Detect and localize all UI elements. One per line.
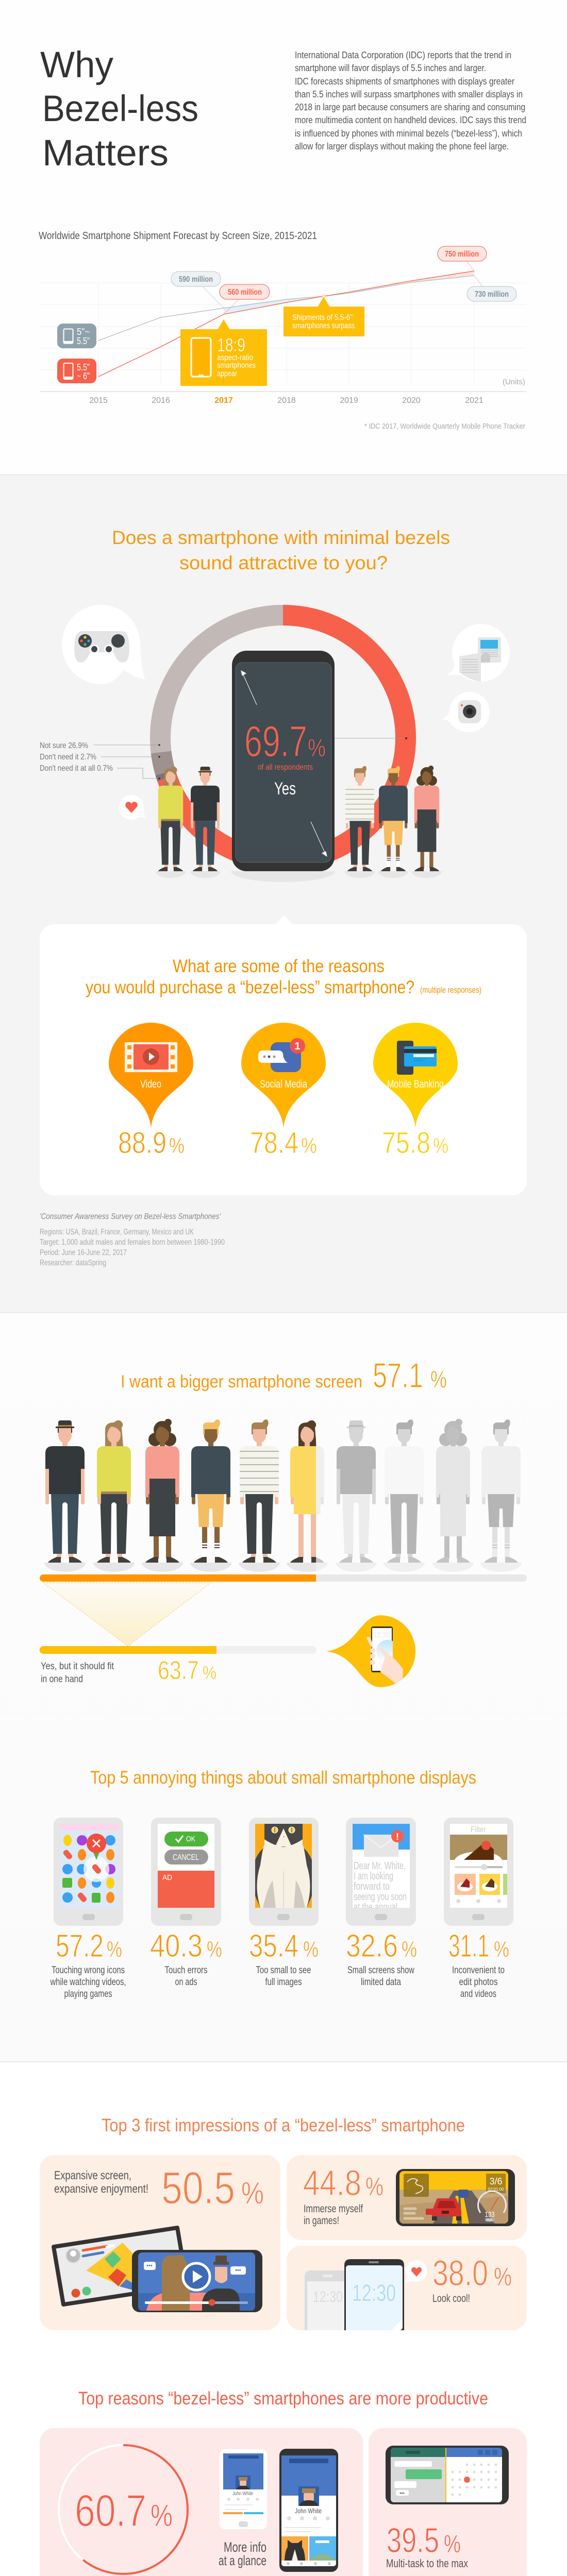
racing game phone: 133 — [485, 2210, 495, 2219]
expansive text — [54, 2168, 148, 2195]
donut labels: Don't need it at all 0.7% — [40, 764, 113, 773]
survey note: Researcher: dataSpring — [40, 1259, 106, 1267]
yes: Yes — [274, 779, 296, 799]
racing game phone — [396, 2169, 515, 2226]
gray series — [98, 276, 474, 341]
year axis labels — [89, 396, 483, 405]
intro text block: than 5.5 inches will surpass smartphones with smaller displays in — [295, 89, 523, 99]
line chart — [40, 246, 526, 405]
large profile phone: John White — [295, 2507, 322, 2515]
back phone: 12:30 — [313, 2289, 343, 2306]
small profile phone: John White — [232, 2491, 253, 2497]
top 5 percents: % — [107, 1937, 122, 1962]
racing game phone: 02:01:00 — [488, 2187, 504, 2192]
callout: shipments surpass — [284, 297, 364, 336]
heart bubble — [405, 2260, 427, 2283]
front phone — [344, 2259, 404, 2330]
red series — [98, 271, 474, 377]
phone: touch errors on ads — [151, 1818, 221, 1926]
intro text block: is influenced by phones with minimal bezels (“bezel-less”), which — [295, 128, 522, 139]
heading: bigger screen: % — [430, 1366, 447, 1393]
video phone illustration: ••• — [146, 2263, 153, 2269]
tablet illustration — [54, 2228, 187, 2304]
phone: touch errors on ads: AD — [162, 1873, 172, 1882]
legend: 5 to 5.5 inch: 5"~ — [77, 327, 90, 337]
callout: 18:9: aspect-ratio — [217, 353, 253, 362]
top 5 percents: % — [207, 1937, 222, 1962]
phone: limited data: ! — [396, 1832, 399, 1842]
callout: 750 million — [438, 246, 487, 271]
reasons heading — [86, 956, 481, 997]
top 5 percents: 32.6 — [346, 1928, 398, 1964]
callout: 560 million — [220, 284, 270, 314]
phone: touch errors on ads: OK — [186, 1835, 195, 1843]
legend: 5.5 to 6 inch: ~ 6" — [77, 371, 90, 381]
expansive text: expansive enjoyment! — [54, 2182, 148, 2195]
top 5 descriptions: full images — [265, 1976, 302, 1988]
progress bar: 57.1 percent — [40, 1574, 527, 1582]
icon: film — [125, 1042, 177, 1072]
phone: limited data: forward to — [354, 1881, 390, 1892]
pin: mobile banking — [373, 1023, 458, 1128]
survey note: Period: June 16-June 22, 2017 — [40, 1248, 127, 1257]
percent: 75.8: % — [433, 1133, 448, 1158]
immersive text — [304, 2203, 363, 2227]
legend: 5 to 5.5 inch — [57, 324, 96, 348]
callout: 560 million: 560 million — [228, 288, 262, 297]
one hand label: in one hand — [41, 1674, 83, 1685]
one hand label — [41, 1661, 114, 1685]
top 5 descriptions: Too small to see — [256, 1964, 311, 1976]
phone: edit photos — [444, 1818, 513, 1926]
percent: 60.7: 60.7 — [75, 2486, 146, 2536]
top 5 descriptions: Inconvenient to — [452, 1964, 505, 1976]
pin: social media — [241, 1023, 326, 1128]
look cool text: Look cool! — [432, 2293, 470, 2304]
phone: limited data: at the annual — [354, 1902, 397, 1913]
racing game phone: mph — [487, 2219, 493, 2222]
panel: expansive screen — [40, 2155, 280, 2330]
multitask phone — [386, 2446, 509, 2504]
multitask phone: ••• — [399, 2490, 405, 2496]
callout: shipments surpass: Shipments of 5.5-6" — [292, 313, 353, 322]
heading: top 3: Top 3 first impressions of a “bezel-less” smartphone — [102, 2115, 465, 2136]
top 5 percents: 31.1 — [448, 1928, 489, 1964]
top 5 descriptions — [50, 1964, 505, 1999]
phone: wrong icons — [54, 1818, 123, 1926]
title — [40, 45, 198, 174]
top 5 descriptions: edit photos — [459, 1976, 498, 1988]
racing game phone: 3/6 — [489, 2176, 503, 2187]
survey note: Regions: USA, Brazil, France, Germany, Mexico and UK — [40, 1228, 194, 1236]
top 5 percents: 40.3 — [150, 1928, 203, 1964]
year axis labels: 2017 — [214, 396, 233, 405]
percent: 78.4: % — [301, 1133, 317, 1158]
panel: look cool — [287, 2246, 527, 2330]
legend: 5 to 5.5 inch: 5.5" — [77, 336, 90, 346]
heading: bigger screen: I want a bigger smartphone screen — [121, 1372, 362, 1392]
top 5 percents: % — [494, 1937, 509, 1962]
icon: card — [397, 1041, 437, 1075]
intro text block: allow for larger displays without making the phone feel large. — [295, 141, 509, 151]
pin: video — [109, 1023, 193, 1128]
phone body — [232, 651, 335, 871]
expansive text: Expansive screen, — [54, 2168, 131, 2182]
top 5 descriptions: Touching wrong icons — [52, 1964, 125, 1976]
video phone illustration: ••• — [235, 2267, 241, 2274]
icon: social: 1 — [294, 1041, 301, 1052]
phone: limited data: seeing you soon — [354, 1891, 407, 1903]
heading: bigger screen: 57.1 — [373, 1356, 423, 1395]
percent: 50.5: 50.5 — [161, 2162, 235, 2213]
bubble: gamepad — [62, 605, 145, 684]
panel: multi-task — [369, 2428, 527, 2576]
heading: more productive: Top reasons “bezel-less” smartphones are more productive — [78, 2388, 488, 2409]
top 5 percents: 35.4 — [249, 1928, 298, 1964]
area between lines — [224, 271, 474, 314]
percent: 44.8: % — [365, 2172, 383, 2201]
heading: does a smartphone: sound attractive to you? — [179, 552, 388, 573]
legend: 5.5 to 6 inch — [57, 359, 96, 383]
phone shadow — [231, 871, 335, 882]
chart footnote: * IDC 2017, Worldwide Quarterly Mobile Phone Tracker — [364, 422, 525, 431]
pin: mobile banking: Mobile Banking — [387, 1078, 444, 1090]
phone: limited data: I am looking — [354, 1871, 393, 1882]
bubble: camera — [441, 692, 490, 732]
percent: 88.9: 88.9 — [118, 1126, 166, 1160]
top 5 percents: % — [303, 1937, 319, 1962]
percent: 75.8: 75.8 — [382, 1126, 430, 1160]
chart title: Worldwide Smartphone Shipment Forecast by Screen Size, 2015-2021 — [39, 230, 317, 242]
video phone illustration — [132, 2250, 262, 2312]
callout: 18:9: smartphones — [217, 361, 256, 370]
icon: social — [258, 1038, 305, 1072]
intro text block: smartphone will favor displays of 5.5 inches and larger. — [295, 63, 486, 73]
intro text block: IDC forecasts shipments of smartphones with displays greater — [295, 76, 514, 87]
year axis labels: 2020 — [402, 396, 421, 405]
year axis labels: 2016 — [152, 396, 170, 405]
bubble: heart — [119, 795, 145, 820]
panel: immersive games — [287, 2155, 527, 2240]
intro text block: 2018 in large part because consumers are sharing and consuming — [295, 102, 525, 112]
panel: reasons — [40, 916, 527, 1195]
top 5 descriptions: limited data — [361, 1976, 401, 1988]
title: Matters — [42, 133, 169, 174]
expand arrows — [241, 671, 327, 856]
survey note: 'Consumer Awareness Survey on Bezel-less Smartphones' — [40, 1212, 221, 1221]
callout: 18:9 — [180, 319, 267, 386]
callout: 730 million: 730 million — [475, 290, 509, 299]
top 5 percents — [56, 1928, 509, 1964]
more info text: at a glance — [219, 2553, 266, 2568]
donut chart — [160, 615, 406, 860]
percent: 39.5: % — [444, 2531, 461, 2558]
top 5 descriptions: playing games — [64, 1988, 112, 1999]
immersive text: in games! — [304, 2215, 339, 2227]
one hand label: Yes, but it should fit — [41, 1661, 114, 1672]
large profile phone — [279, 2449, 338, 2572]
heading: does a smartphone — [112, 527, 450, 573]
heading: bigger screen — [121, 1356, 447, 1395]
top 5 descriptions: on ads — [175, 1976, 197, 1988]
percent: 38.0: 38.0 — [432, 2253, 488, 2293]
year axis labels: 2018 — [277, 396, 296, 405]
percent: 88.9: % — [169, 1133, 185, 1158]
multitask text: Multi-task to the max — [386, 2557, 468, 2570]
reasons heading: you would purchase a “bezel-less” smartphone? — [86, 977, 414, 997]
title: Why — [40, 45, 113, 86]
top 5 percents: 57.2 — [56, 1928, 104, 1964]
year axis labels: 2021 — [465, 396, 483, 405]
immersive text: Immerse myself — [304, 2203, 363, 2215]
callout: 590 million: 590 million — [179, 275, 213, 284]
people group — [156, 766, 442, 878]
phone screen — [236, 663, 331, 862]
callout: shipments surpass: smartphones surpass — [292, 321, 355, 330]
more info text: More info — [224, 2539, 266, 2555]
people row — [44, 1419, 522, 1572]
percent: 50.5: % — [241, 2176, 264, 2210]
callout: 750 million: 750 million — [445, 250, 479, 259]
phone with yes result — [231, 651, 335, 882]
bubble: one hand phone — [326, 1615, 415, 1689]
phone: touch errors on ads: CANCEL — [173, 1853, 199, 1862]
reasons heading: (multiple responses) — [420, 985, 481, 995]
percent: 38.0: % — [494, 2262, 512, 2291]
callout: 730 million — [467, 276, 516, 301]
year axis labels: 2019 — [340, 396, 358, 405]
top 5 percents: % — [402, 1937, 417, 1962]
small profile phone — [220, 2449, 267, 2529]
heading: top 5: Top 5 annoying things about small smartphone displays — [90, 1768, 476, 1788]
top 5 descriptions: while watching videos, — [50, 1976, 126, 1988]
intro text block: International Data Corporation (IDC) reports that the trend in — [295, 50, 511, 60]
69.7 percent: % — [308, 735, 326, 762]
callout: 590 million — [171, 272, 224, 308]
percent: 63.7: % — [203, 1662, 216, 1683]
bubble: one hand phone: 12:30 — [373, 1631, 390, 1639]
percent: 39.5: 39.5 — [387, 2521, 439, 2560]
phone: edit photos: Filter — [471, 1825, 487, 1834]
percent: 60.7: % — [151, 2498, 173, 2533]
top 5 descriptions: Touch errors — [165, 1964, 208, 1976]
69.7 percent: 69.7 — [244, 717, 307, 766]
survey note — [40, 1212, 225, 1267]
percent: 63.7: 63.7 — [158, 1656, 199, 1685]
title: Bezel-less — [42, 89, 198, 129]
callout: 18:9: 18:9 — [217, 334, 245, 355]
phone: limited data — [346, 1818, 416, 1926]
callout: 18:9: appear — [217, 369, 237, 378]
percent: 44.8: 44.8 — [303, 2163, 361, 2203]
panel: more info — [40, 2428, 363, 2576]
pin: social media: Social Media — [260, 1078, 307, 1090]
intro text block: more multimedia content on handheld devices. IDC says this trend — [295, 115, 526, 125]
donut labels: Don't need it 2.7% — [40, 753, 96, 761]
dashed funnel — [43, 1583, 211, 1646]
front phone: 12:30 — [352, 2280, 396, 2306]
more info text — [219, 2539, 266, 2568]
crossover marker — [323, 295, 325, 298]
donut labels: Not sure 26.9% — [40, 741, 88, 750]
donut labels — [40, 737, 407, 779]
back phone — [305, 2270, 347, 2330]
ring: 60.7 percent — [59, 2445, 188, 2574]
survey note: Target: 1,000 adult males and females born between 1980-1990 — [40, 1238, 225, 1247]
heading: does a smartphone: Does a smartphone with minimal bezels — [112, 527, 450, 548]
top 5 descriptions: and videos — [460, 1988, 496, 1999]
progress bar: 63.7 percent — [40, 1646, 316, 1654]
legend: 5.5 to 6 inch: 5.5" — [77, 362, 90, 372]
units: (Units) — [503, 378, 525, 386]
percent: 78.4: 78.4 — [250, 1126, 298, 1160]
phone: cat too small — [249, 1818, 319, 1926]
reasons heading: What are some of the reasons — [173, 956, 385, 976]
phone: limited data: Dear Mr. White, — [354, 1860, 406, 1872]
bubble: news — [446, 624, 510, 682]
intro text block — [295, 50, 526, 151]
year axis labels: 2015 — [89, 396, 108, 405]
pin: video: Video — [140, 1078, 161, 1090]
top 5 descriptions: Small screens show — [347, 1964, 415, 1976]
of all respondents: of all respondents — [258, 763, 313, 772]
